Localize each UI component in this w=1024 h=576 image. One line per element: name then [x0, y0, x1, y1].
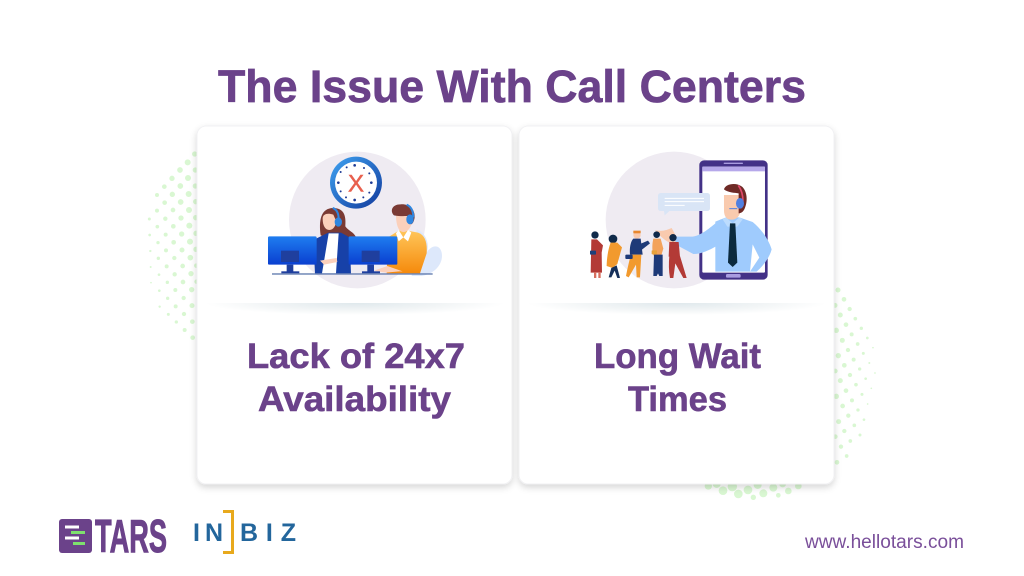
- speech bubble: [658, 193, 710, 215]
- icon: clock: X: [348, 171, 364, 198]
- icon: clock: [330, 157, 382, 209]
- card label: Long Wait: [594, 337, 761, 376]
- panel: lack of availability: [197, 126, 512, 484]
- right monitor: [349, 236, 397, 273]
- card background: [519, 126, 834, 484]
- panel: long wait times: [519, 126, 834, 484]
- backdrop circle: [289, 152, 426, 288]
- queue person 3: [625, 231, 650, 277]
- logo: INBIZ: [193, 512, 296, 552]
- left monitor: [268, 236, 317, 273]
- queue person 4: [652, 231, 663, 276]
- queue person 5: [669, 234, 687, 278]
- man agent: [374, 204, 427, 273]
- phone: [699, 160, 768, 280]
- website url: www.hellotars.com: [804, 532, 964, 553]
- desk: [272, 273, 433, 275]
- card label: [247, 337, 465, 419]
- queue person 1: [590, 231, 603, 278]
- agent: [655, 184, 772, 272]
- title: The Issue With Call Centers: [218, 61, 806, 112]
- logo: TARS: [59, 510, 167, 562]
- woman agent: [313, 208, 356, 273]
- bracket: [223, 512, 232, 552]
- card label: [594, 337, 761, 419]
- logo: INBIZ: IN: [193, 519, 223, 547]
- decorative dots: right: [705, 287, 876, 500]
- plant: [412, 229, 442, 276]
- card label: Times: [628, 380, 727, 419]
- illustration: queue and phone agent: [590, 152, 772, 288]
- queue person 2: [607, 235, 622, 278]
- floor shadow: [527, 303, 827, 327]
- icon: TARS mark: [59, 519, 92, 553]
- card background: [197, 126, 512, 484]
- logo: TARS: TARS: [95, 510, 167, 562]
- backdrop circle: [606, 152, 742, 288]
- floor shadow: [205, 303, 505, 327]
- logo: INBIZ: BIZ: [240, 519, 296, 547]
- illustration: agents and clock: [268, 152, 442, 288]
- card label: Availability: [258, 380, 452, 419]
- card label: Lack of 24x7: [247, 337, 465, 376]
- decorative dots: left: [148, 151, 199, 340]
